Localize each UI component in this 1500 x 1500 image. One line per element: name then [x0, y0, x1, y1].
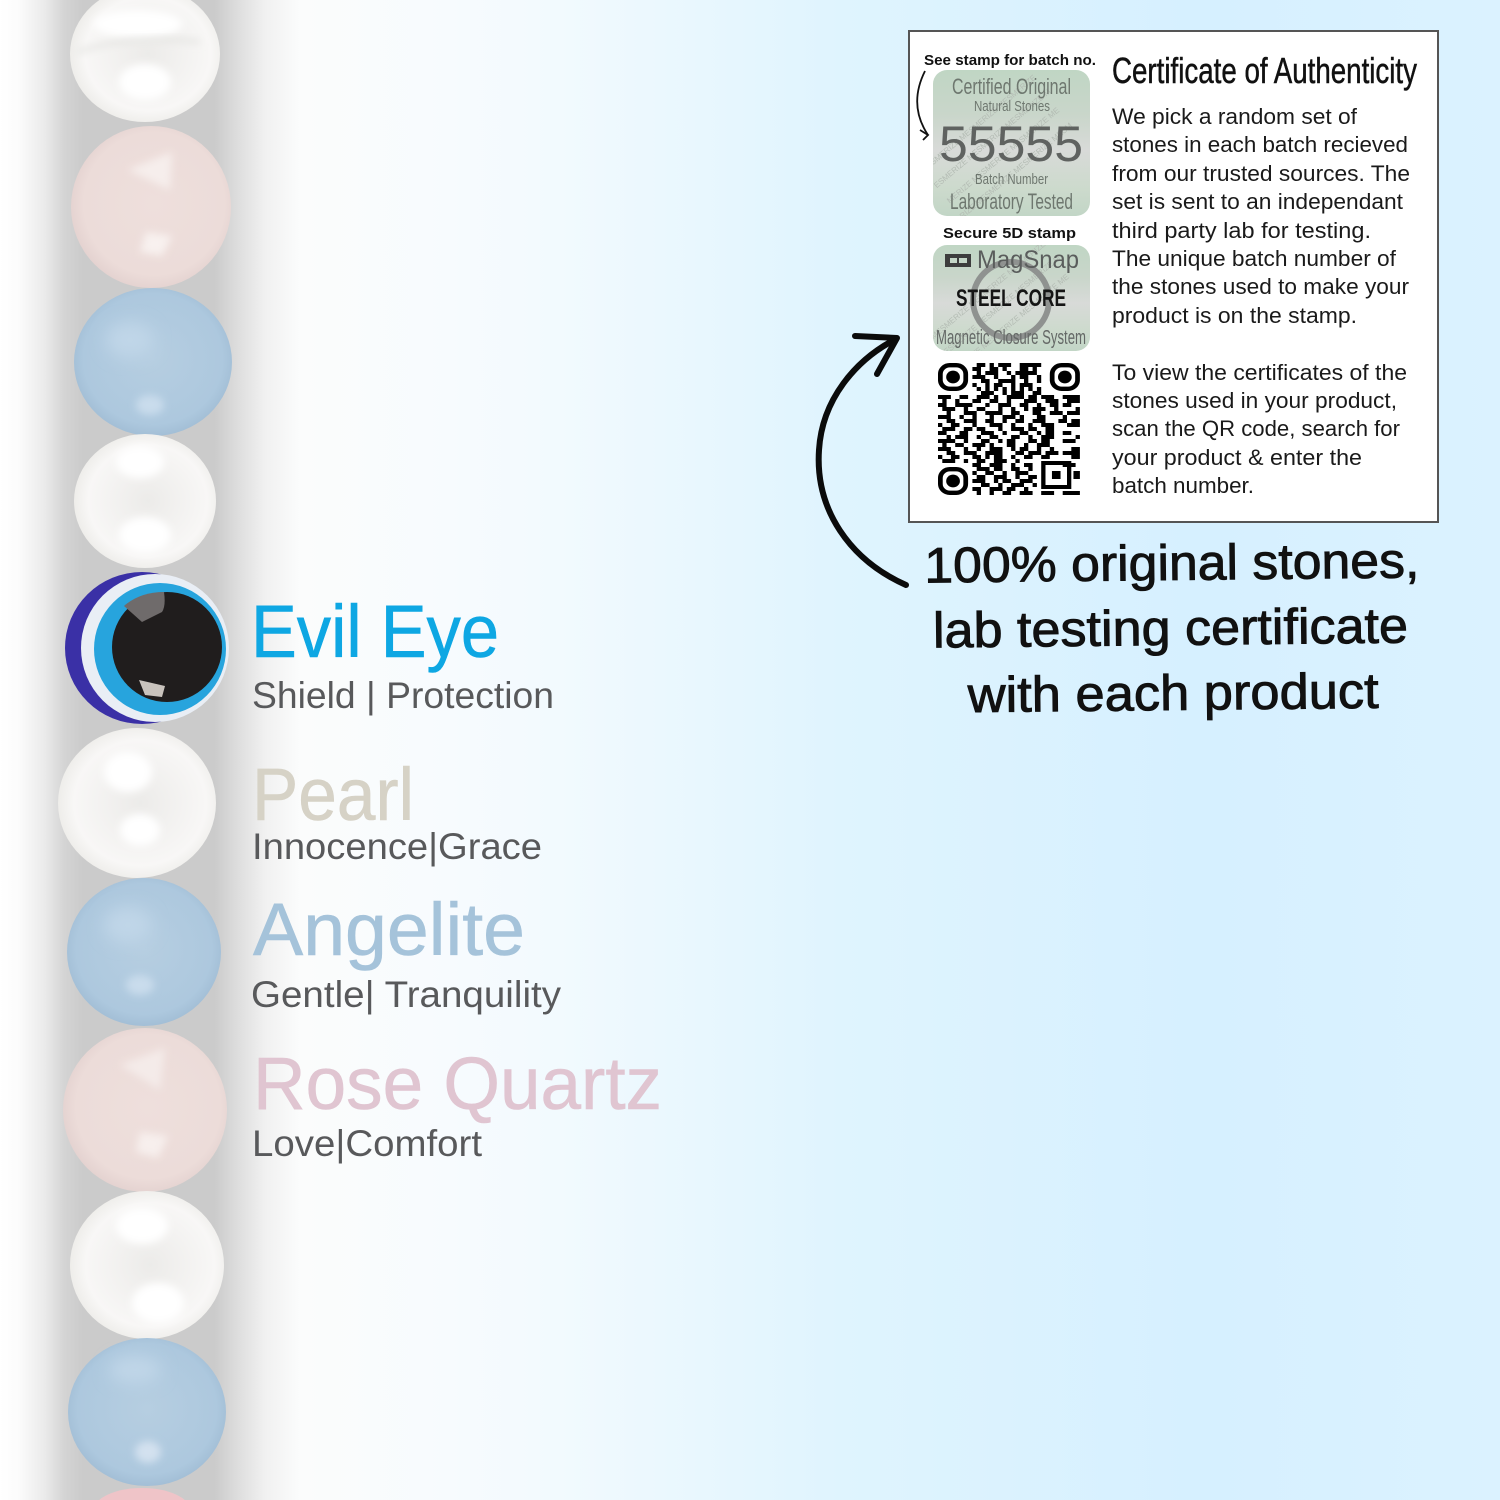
caption: 100% original stones [924, 532, 1421, 724]
magnetic closure stamp: STEEL CORE [956, 285, 1066, 312]
bead: angelite 1 [74, 288, 232, 436]
magnetic closure stamp: ESMERIZE MESMERIZE MESMERIZE M [942, 253, 1062, 356]
batch stamp: MERIZE MESMERIZE MESMERIZE ME [945, 106, 1061, 205]
certificate title: Certificate of Authenticity [1112, 50, 1417, 91]
panel: certificate card [909, 31, 1438, 522]
caption: 100% original stones: with each product [966, 663, 1379, 723]
bead: pearl 4 [70, 1191, 224, 1339]
label: Evil Eye: Evil Eye [251, 590, 499, 673]
label: Pearl: Innocence|Grace [252, 826, 542, 867]
label: Evil Eye: Shield | Protection [252, 675, 554, 716]
label: Rose Quartz [252, 1042, 662, 1164]
magnetic closure stamp: Magnetic Closure System [936, 327, 1086, 349]
batch stamp: Laboratory Tested [950, 189, 1073, 214]
batch stamp: 55555 [939, 116, 1083, 172]
batch stamp: Natural Stones [974, 98, 1050, 115]
label: Angelite: Angelite [253, 888, 525, 971]
bead: angelite 2 [67, 878, 221, 1026]
stamp caption: See stamp for batch no. [924, 52, 1096, 69]
certificate paragraph 2: stones used in your product, [1112, 388, 1397, 413]
certificate paragraph 1: from our trusted sources. The [1112, 161, 1410, 186]
label: Angelite: Gentle| Tranquility [251, 974, 562, 1015]
certificate paragraph 1 [1112, 104, 1410, 328]
batch stamp: ESMERIZE MESMERIZE MESMERIZE M [932, 87, 1053, 190]
certificate paragraph 2: To view the certificates of the [1112, 360, 1407, 385]
magnetic closure stamp [933, 245, 1090, 351]
batch stamp: Batch Number [975, 171, 1048, 188]
bead: angelite 3 [68, 1338, 226, 1486]
magnetic closure stamp: MERIZE MESMERIZE MESMERIZE ME [955, 272, 1071, 372]
label: Rose Quartz: Rose Quartz [253, 1042, 662, 1125]
bead: top pearl [70, 0, 220, 122]
certificate paragraph 1: We pick a random set of [1112, 104, 1358, 129]
batch stamp [933, 70, 1090, 216]
caption: 100% original stones: lab testing certificate [933, 598, 1408, 659]
certificate paragraph 2: scan the QR code, search for [1112, 416, 1400, 441]
label: Pearl [252, 753, 542, 867]
label: Angelite [251, 888, 562, 1015]
bead: rose quartz 2 [63, 1028, 227, 1192]
certificate paragraph 1: set is sent to an independant [1112, 189, 1403, 214]
batch stamp: MESMERIZE MESMERIZE MESMERIZE [919, 73, 1038, 175]
bead: pearl 3 [58, 728, 216, 878]
stamp caption: Secure 5D stamp [943, 225, 1076, 242]
bead: rose quartz 1 [71, 126, 231, 288]
magnetic closure stamp: MagSnap [977, 246, 1079, 274]
batch stamp: Certified Original [952, 74, 1071, 99]
certificate paragraph 2 [1112, 360, 1407, 498]
bead strand [58, 0, 232, 1500]
bead: evil eye [65, 572, 229, 724]
label: Evil Eye [251, 590, 554, 716]
certificate paragraph 1: third party lab for testing. [1112, 218, 1371, 243]
bead: bottom rose sliver [94, 1488, 190, 1500]
arrow: curved to certificate [819, 336, 906, 585]
caption: 100% original stones: 100% original stones, [924, 532, 1420, 594]
bead: pearl 2 [74, 434, 216, 568]
label: Pearl: Pearl [252, 753, 414, 836]
certificate paragraph 2: your product & enter the [1112, 445, 1362, 470]
label: Rose Quartz: Love|Comfort [252, 1123, 483, 1164]
batch stamp: RIZE MESMERIZE MESMERIZE MESM [958, 121, 1074, 220]
certificate paragraph 1: The unique batch number of [1112, 246, 1397, 271]
certificate paragraph 1: the stones used to make your [1112, 274, 1409, 299]
QR alignment square [1028, 461, 1080, 495]
certificate paragraph 2: batch number. [1112, 473, 1254, 498]
certificate paragraph 1: product is on the stamp. [1112, 303, 1357, 328]
magnetic closure stamp: MESMERIZE MESMERIZE MESMERIZE [929, 240, 1048, 341]
certificate paragraph 1: stones in each batch recieved [1112, 132, 1408, 157]
icon: small curved arrow [917, 71, 928, 140]
QR code [938, 365, 1080, 495]
